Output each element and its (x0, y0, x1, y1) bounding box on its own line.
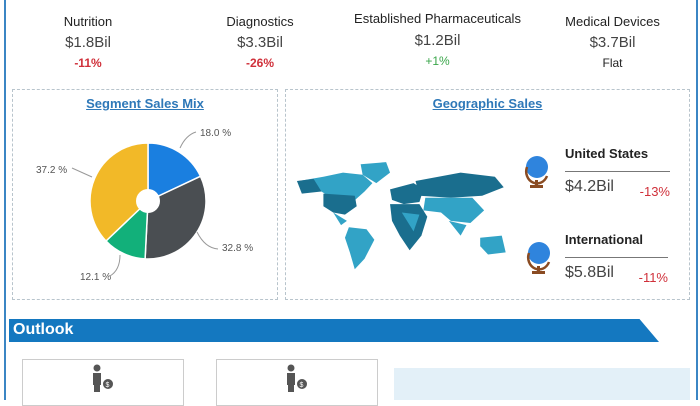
pie chart (36, 128, 253, 283)
outlook card 2 (216, 359, 378, 406)
heading: Segment Sales Mix (86, 96, 204, 111)
icon: person dollar (93, 364, 113, 392)
icon: person dollar: $ (106, 382, 110, 389)
panel: geographic sales (285, 89, 690, 300)
kpi: nutrition: Nutrition (64, 14, 112, 29)
icon: globe US (524, 156, 548, 188)
text: -13% (640, 184, 670, 199)
icon: person dollar: $ (300, 382, 304, 389)
world map (297, 162, 506, 270)
kpi: diagnostics: Diagnostics (226, 14, 294, 29)
pie chart: 18.0 % (200, 128, 231, 139)
kpi: nutrition: -11% (74, 56, 102, 70)
icon: globe international (526, 242, 550, 274)
outlook banner: Outlook (13, 321, 73, 338)
kpi: medical devices (565, 14, 660, 70)
panel: segment sales mix (12, 89, 278, 300)
kpi: nutrition: $1.8Bil (65, 34, 111, 51)
kpi: medical devices: $3.7Bil (590, 34, 635, 51)
kpi: established pharma (354, 11, 521, 68)
quote box (394, 368, 690, 400)
kpi: diagnostics (226, 14, 294, 70)
kpi: established pharma: Established Pharmaceuticals (354, 11, 521, 26)
kpi: established pharma: +1% (425, 54, 450, 68)
kpi: established pharma: $1.2Bil (415, 32, 460, 49)
kpi: diagnostics: -26% (246, 56, 274, 70)
heading: Geographic Sales (433, 96, 542, 111)
geo: united states: $4.2Bil (565, 178, 614, 195)
geo: united states: United States (565, 146, 648, 161)
pie chart: 37.2 % (36, 165, 67, 176)
kpi: medical devices: Flat (602, 56, 622, 70)
kpi: medical devices: Medical Devices (565, 14, 660, 29)
icon: person dollar (287, 364, 307, 392)
outlook card 1 (22, 359, 184, 406)
pie chart: 12.1 % (80, 272, 111, 283)
pie chart: 32.8 % (222, 243, 253, 254)
geo: international: $5.8Bil (565, 264, 614, 281)
text: -11% (639, 270, 668, 285)
geo: international: International (565, 232, 643, 247)
geo: united states (565, 146, 670, 199)
geo: international (565, 232, 668, 285)
outlook banner (9, 319, 659, 342)
kpi: diagnostics: $3.3Bil (237, 34, 283, 51)
kpi: nutrition (64, 14, 112, 70)
